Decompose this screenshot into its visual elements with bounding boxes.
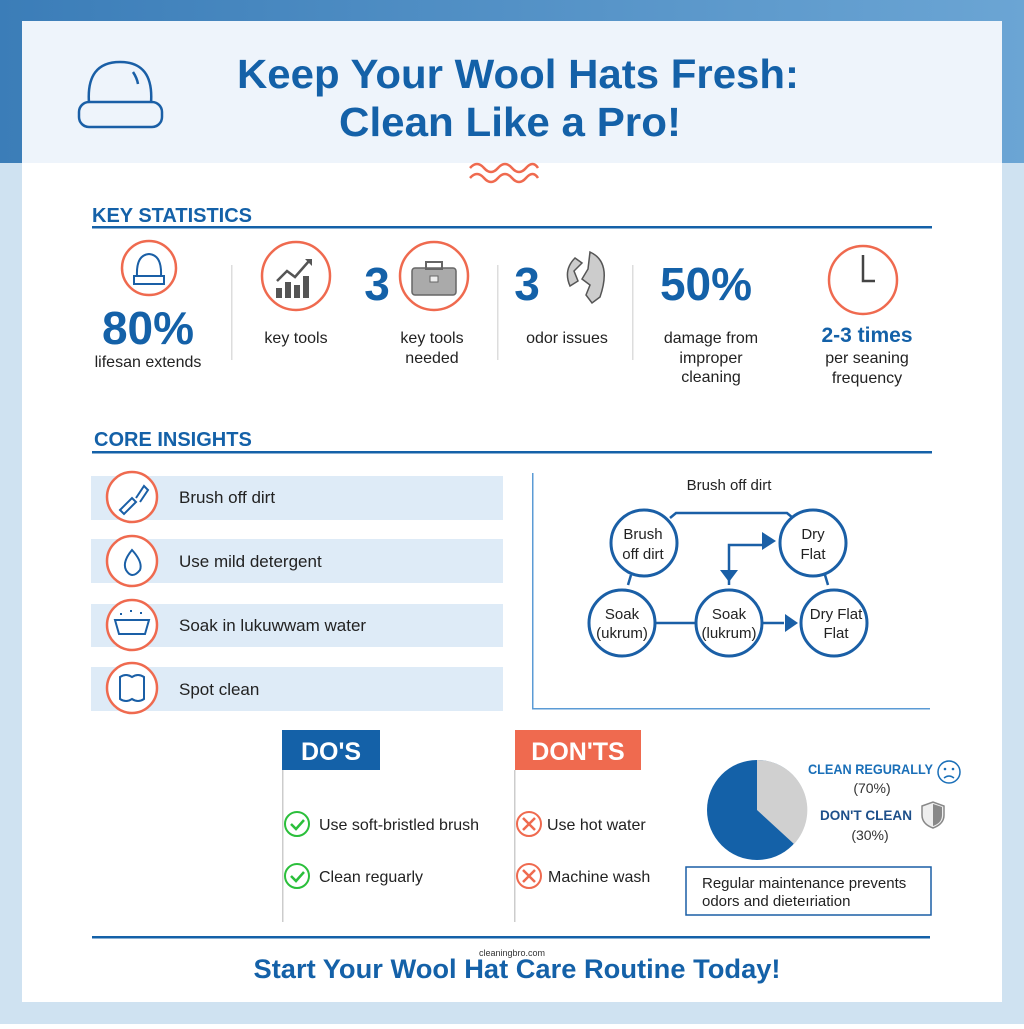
stat: 80% lifespan	[95, 241, 201, 371]
flow chart	[532, 473, 930, 710]
flow chart: Brush	[623, 526, 663, 543]
pie legend: DON'T CLEAN	[820, 807, 912, 823]
stat: 2-3 times frequency	[821, 246, 913, 387]
stat: key tools	[262, 242, 330, 347]
stat: 3 odor issues: odor issues	[526, 330, 608, 347]
stat: 50% damage: improper	[679, 350, 743, 367]
pie legend: (30%)	[851, 827, 889, 843]
stat: 3 key tools needed	[364, 242, 468, 367]
stat: 3 odor issues	[514, 252, 608, 347]
insight list: Use mild detergent	[179, 552, 322, 571]
flow chart: Flat	[823, 625, 849, 642]
stat: 3 key tools needed: needed	[405, 350, 459, 367]
footer: cleaningbro.com	[479, 948, 545, 958]
flow chart: Soak	[605, 606, 640, 623]
pie legend	[808, 761, 960, 843]
do's panel: DO'S	[301, 738, 361, 766]
stat: 50% damage: damage from	[664, 330, 758, 347]
do's panel: Clean reguarly	[319, 869, 423, 886]
pie legend: (70%)	[853, 780, 891, 796]
insight list	[91, 472, 503, 713]
flow chart: Dry	[801, 526, 825, 543]
flow chart: Dry Flat	[810, 606, 863, 623]
stat: 2-3 times frequency: 2-3 times	[821, 324, 913, 347]
callout: odors and dieteıriation	[702, 893, 850, 910]
stat: 3 key tools needed: 3	[364, 258, 390, 310]
title: Clean Like a Pro!	[339, 99, 681, 145]
do's panel	[282, 730, 479, 922]
stat: 2-3 times frequency: per seaning	[825, 350, 909, 367]
pie legend: CLEAN REGURALLY	[808, 761, 934, 777]
flow chart: off dirt	[622, 546, 665, 563]
flow chart: Brush off dirt	[687, 477, 772, 494]
don'ts panel: Machine wash	[548, 869, 650, 886]
flow chart: (lukrum)	[702, 625, 757, 642]
stat: 50% damage: cleaning	[681, 369, 741, 386]
stat: 80% lifespan: lifesan extends	[95, 354, 201, 371]
don'ts panel	[514, 730, 650, 922]
insight list: Brush off dirt	[179, 488, 275, 507]
pie chart	[707, 760, 807, 860]
don'ts panel: DON'TS	[531, 738, 625, 766]
stat: 2-3 times frequency: frequency	[832, 370, 902, 387]
flow chart: Flat	[800, 546, 826, 563]
do's panel: Use soft-bristled brush	[319, 817, 479, 834]
stat: 80% lifespan: 80%	[102, 302, 194, 354]
title: Keep Your Wool Hats Fresh:	[237, 51, 799, 97]
stat: 50% damage	[660, 258, 758, 386]
icon: wool hat	[79, 62, 162, 127]
don'ts panel: Use hot water	[547, 817, 646, 834]
flow chart: (ukrum)	[596, 625, 648, 642]
icon: wavy divider	[470, 164, 538, 182]
footer: Start Your Wool Hat Care Routine Today!	[254, 954, 780, 984]
insight list: Soak in lukuwwam water	[179, 616, 366, 635]
stat: 3 odor issues: 3	[514, 258, 540, 310]
callout	[686, 867, 931, 915]
heading: core insights: CORE INSIGHTS	[94, 429, 252, 451]
stat: 3 key tools needed: key tools	[400, 330, 464, 347]
heading: key statistics: KEY STATISTICS	[92, 205, 252, 227]
stat: 50% damage: 50%	[660, 258, 752, 310]
callout: Regular maintenance prevents	[702, 875, 906, 892]
flow chart: Soak	[712, 606, 747, 623]
stat: key tools: key tools	[264, 330, 328, 347]
title	[237, 51, 799, 145]
insight list: Spot clean	[179, 680, 259, 699]
